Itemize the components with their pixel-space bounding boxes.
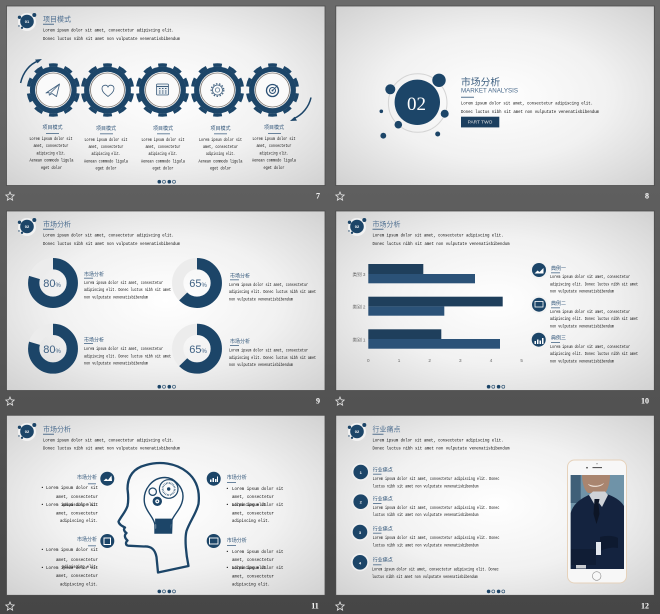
phone home button xyxy=(592,572,601,580)
numbered item 2: luctus nibh sit amet non vulputate venenatisbibendum xyxy=(373,513,479,518)
slide 12: industry pain points xyxy=(336,415,654,610)
footer star icon xyxy=(6,192,14,200)
donut 65% bottom xyxy=(178,329,216,368)
intro text: Donec luctus nibh sit amet non vulputate venenatisbibendum xyxy=(43,242,180,247)
column 5 caption: eget dolor xyxy=(264,166,285,171)
body text: Donec luctus nibh sit amet non vulputate venenatisbibendum xyxy=(461,110,599,115)
text block top left: Lorem ipsum dolor sit amet, consectetur xyxy=(84,281,163,286)
text block bottom right: 市场分析 xyxy=(227,537,247,544)
text block bottom right: adipiscing elit. Donec luctus nibh sit amet xyxy=(229,356,316,361)
page number: 7 xyxy=(316,192,320,200)
bar chart xyxy=(352,264,523,363)
header badge: 02 xyxy=(355,429,360,434)
slide panel xyxy=(336,211,654,390)
legend item 2 xyxy=(530,296,638,330)
text block bottom right: non vulputate venenatisbibendum xyxy=(229,363,293,368)
donut 65% bottom: 65% xyxy=(189,344,207,356)
text block top right: Lorem ipsum dolor sit xyxy=(232,487,284,492)
header badge xyxy=(348,423,366,441)
text block bottom left: Lorem ipsum dolor sit amet, consectetur xyxy=(84,347,163,352)
text block bottom right xyxy=(229,338,316,368)
text block bottom left xyxy=(41,536,98,588)
slide panel xyxy=(336,415,654,595)
column 4 caption: Aenean commodo ligula xyxy=(198,159,243,164)
slide panel xyxy=(6,211,325,390)
text block top right: • xyxy=(226,487,229,492)
column 5 caption: amet, consectetur xyxy=(256,144,292,149)
bar chart: 3 xyxy=(459,358,462,363)
page number: 11 xyxy=(311,602,319,610)
intro text xyxy=(43,28,180,42)
text block top left: 市场分析 xyxy=(84,271,104,278)
pagination dots xyxy=(158,590,176,593)
bar chart: 类别 2 xyxy=(352,304,366,311)
numbered item 1 xyxy=(352,463,500,490)
legend item 3: non vulputate venenatisbibendum xyxy=(550,359,614,364)
intro text xyxy=(372,438,510,452)
legend item 1 xyxy=(530,261,638,294)
text block bottom left: • xyxy=(41,548,44,553)
text block bottom left: adipiscing elit. xyxy=(60,582,98,588)
text block top right: adipiscing elit. Donec luctus nibh sit amet xyxy=(229,290,316,295)
intro text: Donec luctus nibh sit amet non vulputate venenatisbibendum xyxy=(43,37,180,42)
column 5 caption: Lorem ipsum dolor sit xyxy=(252,137,296,142)
text block top right xyxy=(226,474,284,524)
column 4 caption: amet, consectetur xyxy=(203,145,238,150)
text block top right xyxy=(229,273,316,302)
column 3 caption: Aenean commodo ligula xyxy=(141,159,185,164)
legend item 3: 典例三 xyxy=(551,334,566,342)
legend item 3 xyxy=(530,331,638,364)
slide 10: bar chart xyxy=(336,211,654,406)
pagination dots xyxy=(487,590,505,593)
numbered item 3: Lorem ipsum dolor sit amet, consectetur adipiscing elit. Donec xyxy=(373,536,500,541)
page number: 12 xyxy=(641,602,649,610)
numbered item 2: Lorem ipsum dolor sit amet, consectetur adipiscing elit. Donec xyxy=(373,506,500,511)
column 1 caption: 项目模式 xyxy=(42,124,63,131)
page number: 9 xyxy=(316,396,320,406)
footer star icon xyxy=(6,602,14,610)
legend item 1: non vulputate venenatisbibendum xyxy=(550,290,614,294)
text block top right: • xyxy=(226,503,229,508)
text block bottom right: adipiscing elit. xyxy=(232,566,268,571)
slide panel xyxy=(6,6,325,186)
intro text: Lorem ipsum dolor sit amet, consectetur adipiscing elit. xyxy=(372,438,504,444)
page number: 10 xyxy=(641,396,649,406)
bar chart: 2 xyxy=(428,358,431,363)
part two button xyxy=(461,117,499,127)
column 1 caption: Lorem ipsum dolor sit xyxy=(30,137,73,142)
numbered item 4: 4 xyxy=(359,560,362,565)
text block top left: adipiscing elit. Donec luctus nibh sit amet xyxy=(84,288,171,293)
header badge: 02 xyxy=(25,224,30,229)
legend item 2: Lorem ipsum dolor sit amet, consectetur xyxy=(550,310,630,315)
numbered item 1: 行业痛点 xyxy=(373,466,393,474)
heading xyxy=(372,220,400,230)
header badge xyxy=(18,218,36,236)
numbered item 2: 行业痛点 xyxy=(373,496,393,503)
footer star icon xyxy=(336,397,344,405)
text block bottom right: • xyxy=(226,566,229,571)
text block bottom right: • xyxy=(226,550,229,555)
numbered item 3: 3 xyxy=(359,530,362,535)
donut 80% bottom xyxy=(34,329,72,368)
heading: 行业痛点 xyxy=(372,424,400,434)
column 4 caption xyxy=(198,125,243,172)
body text: Lorem ipsum dolor sit amet, consectetur adipiscing elit. xyxy=(461,101,593,106)
arrow: top-left arc xyxy=(21,59,42,83)
intro text: Donec luctus nibh sit amet non vulputate venenatisbibendum xyxy=(372,242,510,247)
heading xyxy=(43,424,71,435)
intro text: Lorem ipsum dolor sit amet, consectetur adipiscing elit. xyxy=(43,234,174,238)
large gear wheel xyxy=(159,480,178,498)
intro text xyxy=(372,234,510,247)
bar chart: 5 xyxy=(520,358,523,363)
text block bottom right: Lorem ipsum dolor sit xyxy=(232,566,284,571)
column 4 caption: 项目模式 xyxy=(210,125,231,132)
bar chart: 1 xyxy=(398,358,401,363)
intro text xyxy=(43,234,180,247)
donut 80% top xyxy=(34,264,72,302)
body text xyxy=(461,97,599,115)
text block bottom left: non vulputate venenatisbibendum xyxy=(84,362,148,366)
header badge: 02 xyxy=(25,429,30,434)
bar chart: 类别 1 xyxy=(352,336,366,344)
legend item 3: adipiscing elit. Donec luctus nibh sit amet xyxy=(550,352,638,357)
column 5 caption: Aenean commodo ligula xyxy=(252,159,296,164)
column 2 caption: Lorem ipsum dolor sit xyxy=(84,138,128,143)
phone body xyxy=(568,460,626,583)
heading xyxy=(372,424,400,435)
footer star icon xyxy=(336,192,344,200)
intro text: Lorem ipsum dolor sit amet, consectetur adipiscing elit. xyxy=(372,234,504,238)
text block top left: Lorem ipsum dolor sit xyxy=(46,486,98,491)
text block bottom left: 市场分析 xyxy=(84,336,104,343)
text block bottom left: amet, consectetur xyxy=(56,558,98,563)
column 3 caption: 项目模式 xyxy=(153,125,173,132)
numbered item 4: Lorem ipsum dolor sit amet, consectetur adipiscing elit. Donec xyxy=(372,568,499,572)
header badge: 02 xyxy=(355,224,360,229)
column 2 caption: 项目模式 xyxy=(96,125,116,132)
text block bottom left: amet, consectetur xyxy=(56,574,98,579)
heading: 市场分析 xyxy=(43,424,71,434)
column 2 caption xyxy=(84,125,128,172)
donut 65% top: 65% xyxy=(189,278,207,290)
numbered item 4: luctus nibh sit amet non vulputate venenatisbibendum xyxy=(372,575,478,580)
numbered item 1: luctus nibh sit amet non vulputate venenatisbibendum xyxy=(373,484,479,490)
header badge xyxy=(18,423,36,441)
bar chart: 类别 3 xyxy=(352,271,366,278)
column 4 caption: adipiscing elit. xyxy=(206,152,235,157)
text block top left: amet, consectetur xyxy=(56,512,98,516)
text block top left: Lorem ipsum dolor sit xyxy=(46,503,98,508)
text block bottom left: Lorem ipsum dolor sit xyxy=(46,566,98,571)
heading xyxy=(43,220,71,230)
legend item 2: non vulputate venenatisbibendum xyxy=(550,325,614,330)
column 1 caption xyxy=(30,124,74,171)
text block top right: adipiscing elit. xyxy=(232,519,270,524)
column 2 caption: Aenean commodo ligula xyxy=(84,159,128,164)
text block bottom right: amet, consectetur xyxy=(232,558,274,563)
column 4 caption: Lorem ipsum dolor sit xyxy=(199,138,242,143)
column 3 caption xyxy=(141,125,185,172)
text block top left: 市场分析 xyxy=(77,474,97,481)
part two button: PART TWO xyxy=(468,120,493,126)
intro text: Donec luctus nibh sit amet non vulputate venenatisbibendum xyxy=(372,446,510,452)
head outline xyxy=(118,463,199,572)
slide 9: donut charts xyxy=(6,211,325,406)
text block bottom left: adipiscing elit. xyxy=(62,565,98,570)
text block bottom left: • xyxy=(41,566,44,571)
column 5 caption xyxy=(252,124,296,171)
intro text: Lorem ipsum dolor sit amet, consectetur adipiscing elit. xyxy=(43,438,174,444)
column 3 caption: adipiscing elit. xyxy=(148,152,178,157)
column 3 caption: eget dolor xyxy=(152,166,174,172)
text block top left: adipiscing elit. xyxy=(62,503,98,508)
text block bottom right: amet, consectetur xyxy=(232,574,274,580)
text block top left: amet, consectetur xyxy=(56,495,98,500)
gear row xyxy=(28,65,298,115)
icon: bottom right xyxy=(207,534,221,548)
section number cluster: 02 xyxy=(407,94,426,115)
legend item 1: Lorem ipsum dolor sit amet, consectetur xyxy=(550,275,630,280)
bar chart: 4 xyxy=(490,358,493,363)
numbered item 3: luctus nibh sit amet non vulputate venenatisbibendum xyxy=(373,544,479,548)
text block top left: non vulputate venenatisbibendum xyxy=(84,296,148,300)
heading xyxy=(43,14,71,25)
section title: 市场分析 xyxy=(461,76,500,88)
column 1 caption: Aenean commodo ligula xyxy=(30,159,74,164)
icon: top left xyxy=(100,472,114,486)
text block bottom left: adipiscing elit. Donec luctus nibh sit amet xyxy=(84,354,171,359)
text block bottom left xyxy=(84,336,171,366)
pagination dots xyxy=(487,385,505,388)
photo: businessman xyxy=(571,475,624,569)
donut 80% bottom: 80% xyxy=(43,344,61,356)
column 3 caption: amet, consectetur xyxy=(146,145,181,150)
text block bottom right: Lorem ipsum dolor sit amet, consectetur xyxy=(229,349,308,354)
donut 80% top: 80% xyxy=(43,278,61,290)
footer star icon xyxy=(6,397,14,405)
head with light bulb illustration xyxy=(118,463,199,572)
section number cluster xyxy=(380,74,449,139)
text block bottom left: 市场分析 xyxy=(77,536,97,543)
text block top left xyxy=(41,474,98,524)
text block top left: • xyxy=(41,486,44,491)
icon: top right xyxy=(207,472,221,486)
slide 7: project model gears xyxy=(6,6,325,200)
legend item 1: adipiscing elit. Donec luctus nibh sit amet xyxy=(550,282,638,288)
column 4 caption: eget dolor xyxy=(210,166,231,172)
header badge xyxy=(18,13,36,31)
page number: 8 xyxy=(645,192,649,200)
text block top left: adipiscing elit. xyxy=(60,519,98,524)
column 5 caption: adipiscing elit. xyxy=(260,151,288,156)
column 2 caption: eget dolor xyxy=(96,166,117,172)
text block top right: non vulputate venenatisbibendum xyxy=(229,298,293,302)
heading: 市场分析 xyxy=(372,220,400,228)
text block bottom right xyxy=(226,537,284,588)
icon: bottom left xyxy=(100,534,114,548)
header badge: 01 xyxy=(25,19,30,24)
icon: heart xyxy=(102,85,114,96)
numbered item 1: Lorem ipsum dolor sit amet, consectetur adipiscing elit. Donec xyxy=(373,477,500,482)
intro text xyxy=(43,438,180,452)
bulb base xyxy=(156,519,172,533)
bar chart: 0 xyxy=(367,358,370,363)
column 2 caption: adipiscing elit. xyxy=(92,152,120,157)
column 5 caption: 项目模式 xyxy=(264,124,284,131)
slide panel xyxy=(6,415,325,595)
footer star icon xyxy=(336,602,344,610)
legend item 3: Lorem ipsum dolor sit amet, consectetur xyxy=(550,345,630,350)
arrow: bottom-right arc xyxy=(290,98,311,121)
pagination dots xyxy=(158,180,176,184)
text block bottom left: Lorem ipsum dolor sit xyxy=(46,548,98,553)
pagination dots xyxy=(158,385,176,388)
column 3 caption: Lorem ipsum dolor sit xyxy=(142,138,185,143)
column 1 caption: adipiscing elit. xyxy=(36,151,66,156)
legend item 2: adipiscing elit. Donec luctus nibh sit amet xyxy=(550,317,638,322)
text block top right: amet, consectetur xyxy=(232,512,274,516)
text block top right: 市场分析 xyxy=(230,273,250,280)
legend item 2: 典例二 xyxy=(551,300,566,307)
slide panel xyxy=(336,6,654,186)
text block top right: amet, consectetur xyxy=(232,495,274,500)
numbered item 3: 行业痛点 xyxy=(373,525,393,532)
heading: 市场分析 xyxy=(43,220,71,228)
header badge xyxy=(348,218,366,236)
text block top right: 市场分析 xyxy=(227,474,247,481)
icon: target xyxy=(266,84,278,96)
text block bottom right: 市场分析 xyxy=(230,338,250,345)
numbered item 1: 1 xyxy=(360,470,363,475)
text block top right: adipiscing elit. xyxy=(232,503,268,508)
column 1 caption: amet, consectetur xyxy=(34,144,69,149)
bulb outline xyxy=(144,478,183,533)
column 1 caption: eget dolor xyxy=(41,166,62,171)
text block top right: Lorem ipsum dolor sit amet, consectetur xyxy=(229,283,308,288)
text block bottom right: Lorem ipsum dolor sit xyxy=(232,550,284,555)
icon: paper plane xyxy=(46,84,60,96)
small ring gear xyxy=(149,488,156,495)
text block top right: Lorem ipsum dolor sit xyxy=(232,503,284,508)
legend item 1: 典例一 xyxy=(551,265,566,272)
section subtitle: MARKET ANALYSIS xyxy=(461,88,519,94)
phone mockup xyxy=(568,460,626,583)
text block bottom right: adipiscing elit. xyxy=(232,582,270,588)
intro text: Donec luctus nibh sit amet non vulputate venenatisbibendum xyxy=(43,446,180,452)
icon: cog xyxy=(211,84,224,96)
slide 8: market analysis section xyxy=(336,6,654,200)
numbered item 3 xyxy=(351,523,500,548)
intro text: Lorem ipsum dolor sit amet, consectetur adipiscing elit. xyxy=(43,28,174,34)
small gear xyxy=(154,498,161,505)
text block top left: • xyxy=(41,503,44,508)
text block top left xyxy=(84,271,171,300)
numbered item 4: 行业痛点 xyxy=(373,556,393,564)
slide 11: head diagram xyxy=(6,415,325,610)
numbered item 2 xyxy=(352,493,500,518)
icon: calendar xyxy=(156,84,168,95)
heading: 项目模式 xyxy=(43,14,71,24)
numbered item 2: 2 xyxy=(360,500,363,505)
numbered item 4 xyxy=(351,553,499,580)
phone speaker xyxy=(586,463,602,468)
donut 65% top xyxy=(178,264,216,302)
column 2 caption: amet, consectetur xyxy=(88,145,124,150)
